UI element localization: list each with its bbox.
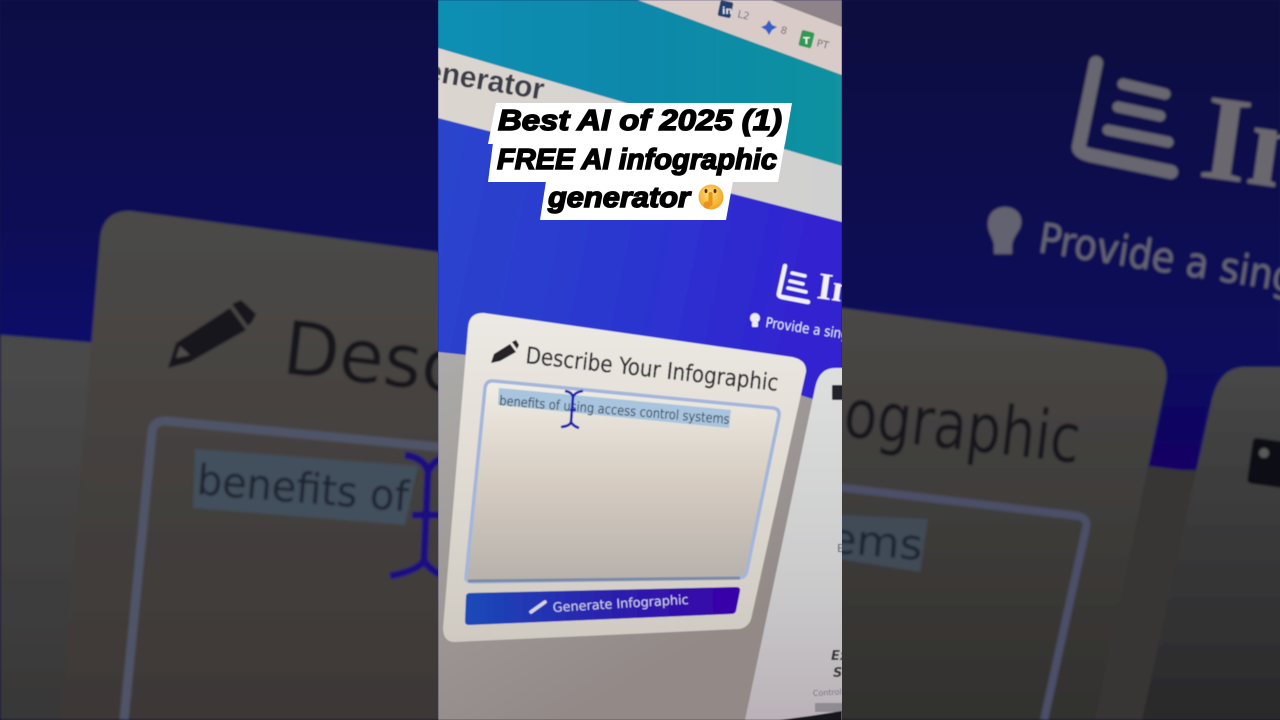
backdrop heading: ographic (840, 374, 1084, 480)
icon: lightbulb (750, 313, 760, 327)
tagline: Provide a sing (764, 315, 850, 343)
backdrop card (90, 209, 438, 720)
site bar word: Generator (400, 50, 547, 107)
backdrop text area (124, 421, 470, 720)
icon: pencil (491, 340, 519, 363)
second card heading: Ex (831, 649, 849, 664)
panel: describe card (443, 313, 806, 642)
backdrop text area (820, 485, 1086, 720)
teal browser page strip (438, 0, 842, 166)
backdrop heading: Describe (279, 305, 607, 427)
second card thumbnail (815, 703, 845, 712)
icon: button pencil (531, 602, 545, 612)
prompt text: benefits of using access control systems (499, 393, 730, 428)
panel: blurred left backdrop (0, 1, 438, 720)
bookmark 8: 8 (779, 25, 788, 37)
bookmark L2: L2 (736, 9, 751, 23)
icon: backdrop text cursor (388, 450, 438, 580)
caption: overlay title (488, 103, 792, 220)
icon: linkedin (717, 0, 734, 18)
site wordmark: In (815, 265, 856, 312)
text area bottom border (468, 578, 740, 581)
selection highlight (498, 388, 731, 428)
icon: text cursor (561, 391, 583, 428)
icon: gemini star (761, 20, 777, 35)
backdrop card (820, 305, 1166, 720)
backdrop second card (1177, 364, 1280, 720)
icon: backdrop lightbulb (988, 207, 1021, 254)
panel: blurred right backdrop (842, 0, 1280, 720)
browser bookmarks bar (638, 0, 842, 75)
second card (744, 367, 842, 720)
icon: green bookmark (798, 30, 815, 48)
caption line 1: Best AI of 2025 (1) (498, 105, 782, 137)
caption line 2: FREE AI infographic (497, 144, 777, 176)
second card heading line 2: S (833, 666, 842, 681)
bookmark PT: PT (815, 38, 831, 52)
generate button (465, 587, 740, 625)
second card small text: Control (813, 687, 842, 698)
pale site bar (400, 48, 842, 222)
text area (466, 381, 779, 582)
page header blue band (438, 117, 842, 408)
button label: Generate Infographic (552, 593, 689, 616)
panel: centre photo of the web page (438, 0, 842, 720)
backdrop selected text: benefits of (195, 455, 412, 521)
icon: shushing face emoji (698, 184, 724, 210)
caption backing (488, 103, 792, 220)
second card letter: E (837, 542, 844, 555)
backdrop selected text: stems (787, 510, 925, 570)
icon: backdrop pencil (168, 300, 256, 368)
bottom dark edge (780, 711, 842, 720)
icon: backdrop image (1247, 437, 1280, 490)
icon: linkedin: in (722, 6, 733, 17)
icon: image (832, 384, 842, 400)
icon: site logo (779, 266, 808, 302)
card heading: Describe Your Infographic (524, 343, 780, 397)
icon: green bookmark: T (803, 36, 810, 47)
caption line 3: generator (547, 182, 692, 214)
icon: backdrop logo (1079, 63, 1171, 172)
backdrop selected text (842, 514, 928, 572)
